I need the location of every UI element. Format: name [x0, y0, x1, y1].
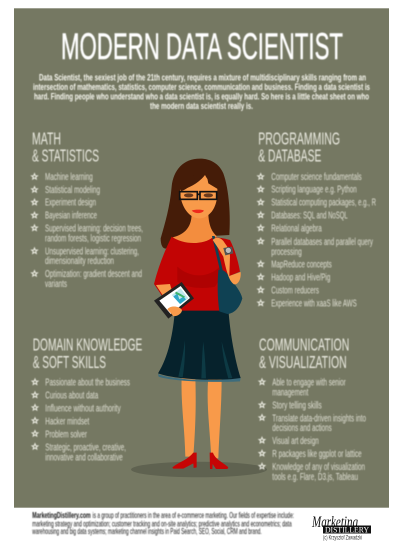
heading: communication and visualization: & VISUALIZATION — [259, 352, 347, 372]
list: communication skills: decisions and actions — [272, 423, 332, 434]
figure shadow — [131, 462, 267, 477]
list: math skills: Bayesian inference — [45, 210, 97, 222]
panel: programming and database — [258, 128, 376, 310]
heading: communication and visualization — [259, 335, 349, 372]
list: programming skills — [258, 172, 376, 310]
list: programming skills: Relational algebra — [271, 224, 322, 234]
list: programming skills: Databases: SQL and NoSQL — [271, 210, 348, 222]
heading: math and statistics: MATH — [32, 128, 61, 148]
panel: communication and visualization — [259, 335, 366, 483]
heading: programming and database — [258, 128, 340, 166]
hair — [161, 159, 230, 249]
footer description: MarketingDistillery.com — [32, 511, 91, 520]
intro paragraph — [33, 72, 370, 112]
illustration: data scientist woman — [154, 159, 242, 469]
list: math skills: Experiment design — [45, 198, 96, 208]
list: domain skills: innovative and collaborative — [45, 452, 123, 464]
list: domain skills: Passionate about the business — [45, 378, 130, 388]
face — [180, 175, 218, 218]
list: math skills: random forests, logistic regression — [45, 234, 141, 244]
footer description — [32, 511, 294, 536]
list: math skills: Machine learning — [45, 172, 93, 183]
list: communication skills: management — [272, 388, 308, 398]
list: math skills: Supervised learning: decision trees, — [45, 224, 143, 234]
intro paragraph: the modern data scientist really is. — [150, 101, 253, 112]
panel: domain knowledge and soft skills — [32, 335, 142, 464]
list: math skills: Statistical modeling — [45, 185, 100, 196]
list: math skills: Unsupervised learning: clustering, — [45, 246, 139, 258]
glasses — [180, 192, 217, 199]
heading: programming and database: PROGRAMMING — [258, 128, 340, 148]
logo: Marketing Distillery — [311, 514, 371, 542]
list: communication skills: Able to engage with senior — [272, 378, 346, 388]
logo: Marketing Distillery: Marketing — [311, 514, 358, 531]
list: math skills: dimensionality reduction — [45, 256, 114, 267]
heading: domain knowledge and soft skills: & SOFT SKILLS — [33, 352, 106, 372]
tablet — [154, 282, 194, 319]
heading: math and statistics: & STATISTICS — [32, 146, 99, 166]
neck and chest — [173, 213, 217, 244]
list: math skills: variants — [45, 279, 67, 290]
list: domain skills: Problem solver — [45, 430, 87, 440]
list: domain skills — [32, 378, 130, 464]
heading: domain knowledge and soft skills: DOMAIN KNOWLEDGE — [33, 335, 142, 355]
list: communication skills: Story telling skills — [272, 400, 322, 412]
list: math skills: Optimization: gradient descent and — [45, 269, 142, 280]
list: domain skills: Hacker mindset — [45, 416, 89, 428]
logo: Marketing Distillery: DISTILLERY — [325, 526, 369, 534]
heading: domain knowledge and soft skills — [33, 335, 142, 372]
list: math skills — [32, 172, 143, 290]
red top — [154, 237, 240, 311]
list: programming skills: Hadoop and Hive/Pig — [271, 272, 330, 284]
skirt — [158, 308, 241, 382]
heading: programming and database: & DATABASE — [258, 146, 321, 166]
legs and shoes — [172, 377, 228, 469]
logo: Marketing Distillery: (c) Krzysztof Zawadzki — [323, 536, 362, 542]
arm and watch — [213, 238, 241, 284]
list: programming skills: Custom reducers — [271, 286, 319, 296]
panel: math and statistics — [32, 128, 143, 290]
heading: math and statistics — [32, 128, 99, 166]
list: programming skills: MapReduce concepts — [271, 260, 332, 270]
list: domain skills: Influence without authority — [45, 404, 121, 414]
list: programming skills: processing — [271, 247, 302, 258]
list: domain skills: Strategic, proactive, creative, — [45, 442, 126, 454]
list: domain skills: Curious about data — [45, 390, 99, 402]
bag — [212, 236, 242, 314]
list: communication skills — [259, 378, 366, 483]
list: communication skills: Visual art design — [272, 436, 319, 447]
